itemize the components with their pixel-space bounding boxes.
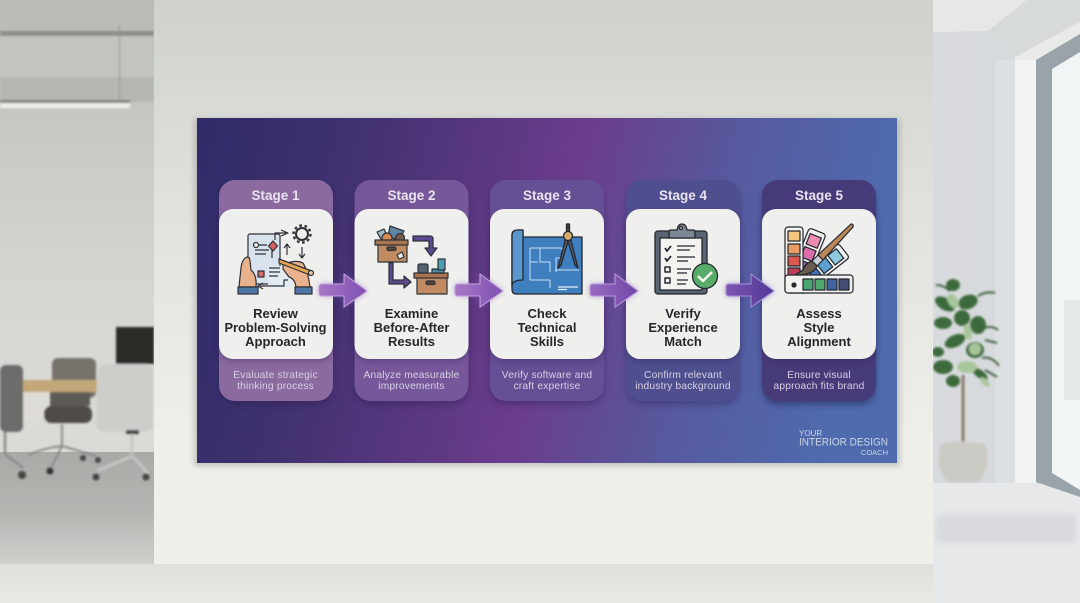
title: stage 2: [374, 306, 449, 349]
panel: stage 5: [762, 180, 876, 405]
logo: your interior design coach: INTERIOR DESIGN: [799, 436, 888, 448]
title: stage 2: Examine: [385, 306, 438, 321]
description: stage 2: Analyze measurable: [364, 370, 460, 381]
description: stage 1: Evaluate strategic: [233, 370, 318, 381]
description: stage 4: industry background: [635, 381, 731, 392]
description: stage 1: [233, 370, 318, 392]
description: stage 2: improvements: [378, 381, 445, 392]
description: stage 1: thinking process: [237, 381, 314, 392]
background: room right with window and plant: [932, 0, 1080, 603]
logo: your interior design coach: COACH: [861, 448, 888, 457]
title: stage 1: Approach: [245, 334, 306, 349]
panel: stage 4: [626, 180, 740, 405]
description: stage 3: [502, 370, 592, 392]
title: stage 1: Problem-Solving: [224, 320, 327, 335]
panel: stage 1: [219, 180, 333, 405]
description: stage 4: Confirm relevant: [644, 370, 722, 381]
arrow: stage 1 to 2: [319, 274, 367, 307]
background: office room left: [0, 0, 154, 603]
heading: stage 2: Stage 2: [387, 188, 436, 203]
description: stage 5: approach fits brand: [773, 381, 865, 392]
heading: stage 3: Stage 3: [523, 188, 571, 203]
heading: stage 5: Stage 5: [795, 188, 843, 203]
description: stage 3: Verify software and: [502, 370, 592, 381]
arrow: stage 2 to 3: [455, 274, 503, 307]
description: stage 2: [364, 370, 460, 392]
icon: colour swatch fan and brush: [785, 224, 853, 294]
title: stage 1: [224, 306, 327, 349]
icon: blueprint with compass: [512, 224, 582, 294]
title: stage 4: Experience: [648, 320, 718, 335]
logo: your interior design coach: [799, 429, 888, 457]
logo: your interior design coach: YOUR: [799, 429, 822, 438]
title: stage 5: Style: [803, 320, 835, 335]
title: stage 5: Alignment: [787, 334, 851, 349]
title: stage 3: Check: [527, 306, 567, 321]
title: stage 2: Results: [388, 334, 435, 349]
icon: checklist clipboard: [655, 224, 718, 294]
panel: infographic board: [197, 118, 897, 463]
title: stage 1: Review: [253, 306, 299, 321]
description: stage 4: [635, 370, 731, 392]
title: stage 5: [787, 306, 851, 349]
icon: potted plant: [932, 279, 999, 482]
title: stage 3: Technical: [517, 320, 577, 335]
description: stage 3: craft expertise: [514, 381, 581, 392]
title: stage 2: Before-After: [374, 320, 449, 335]
heading: stage 1: Stage 1: [251, 188, 300, 203]
title: stage 3: Skills: [530, 334, 564, 349]
title: stage 3: [517, 306, 577, 349]
icon: before and after boxes: [375, 226, 448, 294]
title: stage 5: Assess: [796, 306, 842, 321]
panel: stage 2: [354, 180, 468, 405]
poster shadow: [194, 119, 900, 466]
background: wall: [154, 0, 933, 564]
icon: reviewing a process diagram: [238, 226, 314, 294]
description: stage 5: Ensure visual: [787, 370, 851, 381]
office furniture: [0, 327, 154, 480]
arrow: stage 4 to 5: [726, 274, 774, 307]
panel: stage 3: [490, 180, 604, 405]
title: stage 4: Match: [664, 334, 702, 349]
title: stage 4: Verify: [665, 306, 701, 321]
background: floor: [0, 564, 933, 603]
arrow: stage 3 to 4: [590, 274, 638, 307]
title: stage 4: [648, 306, 718, 349]
heading: stage 4: Stage 4: [659, 188, 707, 203]
description: stage 5: [773, 370, 865, 392]
